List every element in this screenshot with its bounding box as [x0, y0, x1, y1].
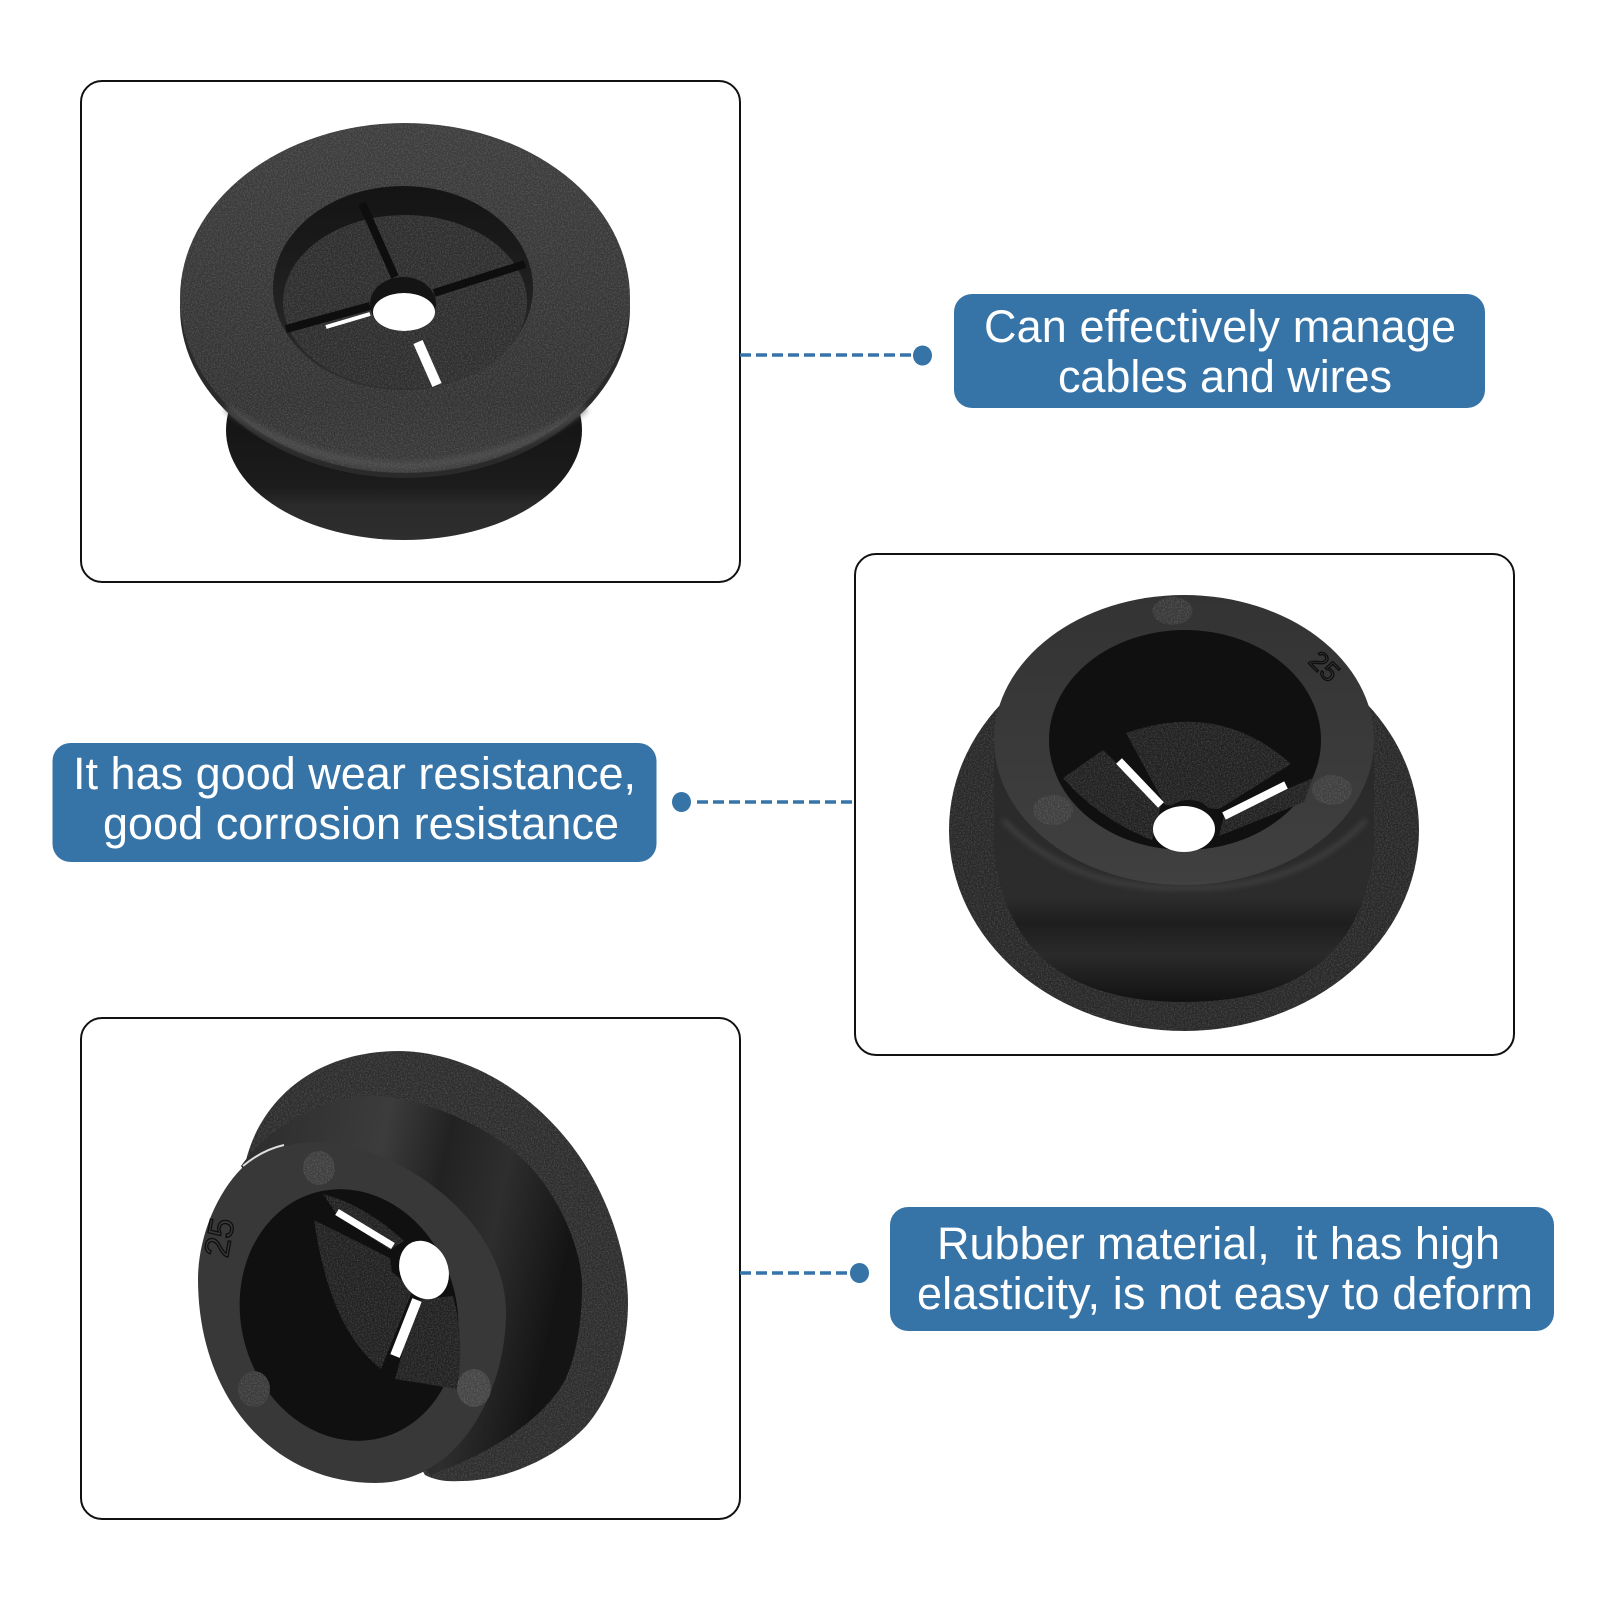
panel: rear grommet view — [855, 554, 1514, 1055]
callout: cable management — [954, 294, 1485, 408]
callout: wear resistance: good corrosion resistance — [103, 798, 619, 849]
image: grommet flange side — [180, 123, 630, 540]
callout: rubber material: Rubber material, it has high — [937, 1218, 1500, 1269]
label: moulded size number: 25 — [197, 1215, 242, 1260]
callout: cable management: cables and wires — [1058, 351, 1392, 402]
callout: wear resistance — [52, 743, 656, 862]
callout: cable management: Can effectively manage — [984, 301, 1456, 352]
image: grommet rear side — [949, 595, 1419, 1031]
connector: bottom — [740, 1263, 869, 1283]
callout: wear resistance: It has good wear resistance, — [73, 748, 636, 799]
connector: middle — [672, 792, 855, 812]
image: grommet angled side — [197, 1051, 628, 1483]
callout: rubber material — [890, 1207, 1554, 1331]
panel: angled grommet view — [81, 1018, 740, 1519]
callout: rubber material: elasticity, is not easy to deform — [917, 1268, 1533, 1319]
label: moulded size number: 25 — [1303, 645, 1346, 688]
panel: top grommet view — [81, 81, 740, 582]
connector: top — [740, 346, 932, 366]
